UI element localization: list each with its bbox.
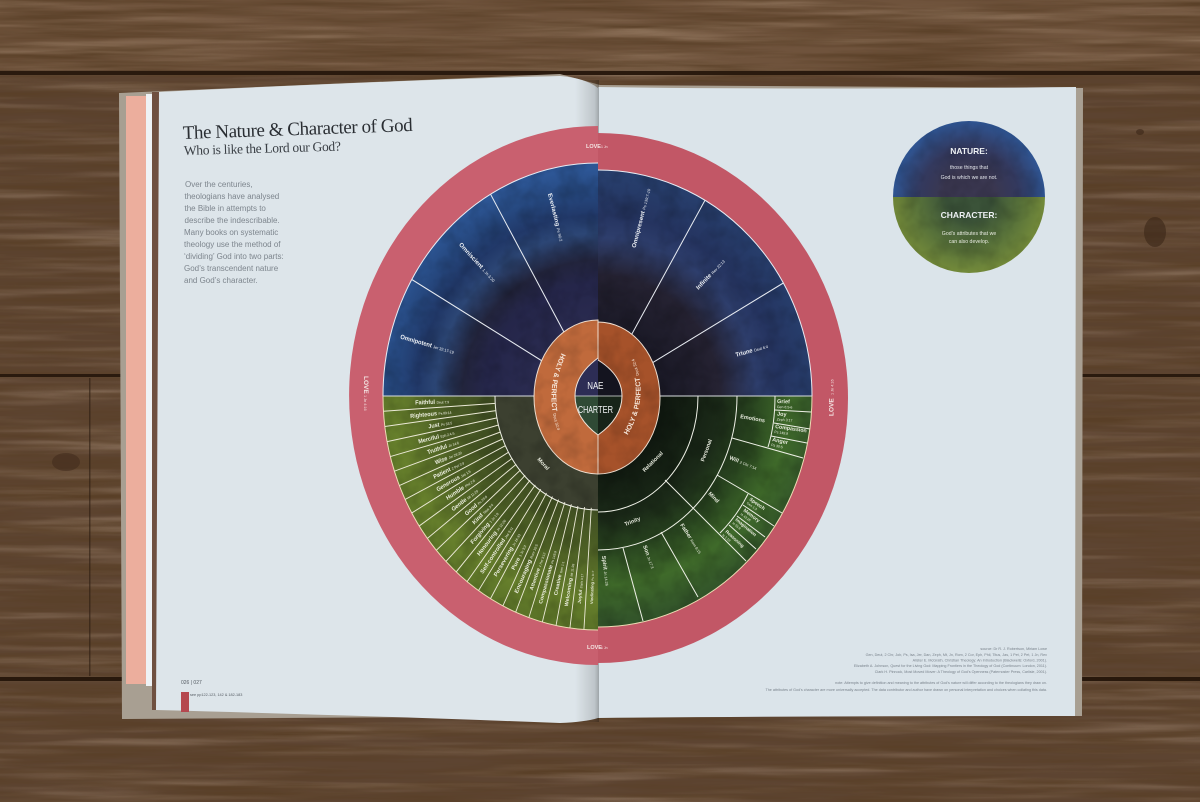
character labels right: Trinity <box>624 516 642 528</box>
intro text: Over the centuries, <box>185 180 253 189</box>
character labels right: Imagination <box>734 517 757 537</box>
outer ring: love: 1 Jn 4:16 <box>363 395 367 411</box>
legend circle: God is which we are not. <box>941 175 997 181</box>
page marker <box>181 692 189 712</box>
intro text: the Bible in attempts to <box>184 204 266 213</box>
moral attribute labels: Honouring Jn 12:26 <box>477 518 508 557</box>
character labels right: Personal <box>700 438 714 463</box>
centre lens: NA <box>587 381 599 392</box>
moral attribute labels: Patient 2 Pet 3:9 <box>433 460 465 481</box>
source notes: Clark H. Pinnock, Most Moved Mover: A Theology of God’s Openness (Paternoster Press, Carlisle, 2001). <box>875 670 1047 674</box>
character labels right: Speech <box>748 497 766 512</box>
legend circle: NATURE: <box>950 146 988 156</box>
moral attribute labels <box>410 399 595 607</box>
intro text <box>184 180 284 285</box>
character labels right: Memory <box>742 508 761 524</box>
intro text: and God’s character. <box>184 276 258 285</box>
nature labels: Omnipotent Jer 32:17-19 <box>399 334 455 356</box>
disc mottled texture <box>383 163 812 630</box>
moral attribute labels: Generous Jas 1:5 <box>436 468 472 493</box>
source notes: Elizabeth A. Johnson, Quest for the Living God: Mapping Frontiers in the Theology of God (Continuum: London, 2011). <box>854 664 1047 668</box>
character labels right: Father Rom 8:15 <box>678 523 702 555</box>
character labels right: Son Jn 17:3 <box>641 545 655 570</box>
character labels right: Mind <box>707 491 720 504</box>
character labels right: Emotions <box>740 414 765 424</box>
nature labels: Triune Deut 6:4 <box>735 344 770 359</box>
nature labels: Everlasting Ps 90:2 <box>546 193 564 242</box>
source notes: Gen, Deut, 2 Chr, Job, Ps, Isa, Jer, Dan, Zeph, Mt, Jn, Rom, 2 Cor, Eph, Phil, Titus, Jas, 1 Pet, 2 Pet, 1 Jn, Rev <box>866 653 1047 657</box>
intro text: Many books on systematic <box>184 228 278 237</box>
centre ring: holy and perfect: HOLY & PERFECT Deut 32:4 <box>624 359 641 435</box>
moral attribute labels: Encouraging Rom 15:5 <box>514 543 540 595</box>
wheel structure lines <box>383 163 812 630</box>
source notes: source: Dr R. J. Robertson, Miriam Lowe <box>980 647 1047 651</box>
nature labels: Infinite Rev 22:13 <box>696 259 727 291</box>
legend circle <box>893 121 1045 273</box>
outer ring: love: LOVE <box>828 398 836 416</box>
character labels right: Ps 145:9 <box>774 430 788 436</box>
moral attribute labels: Joyful Zeph 3:17 <box>577 573 584 604</box>
moral attribute labels: Gentle Mt 11:29 <box>451 488 480 513</box>
source notes <box>765 647 1047 692</box>
character labels right: Joy <box>777 412 787 418</box>
source notes: The attributes of God’s character are more universally accepted. The data contributor and author have drawn on personal interpretation and choices when collating this data. <box>765 688 1047 692</box>
cross reference: see pp122-123, 142 & 182-183 <box>190 693 242 697</box>
title: The Nature & Character of God <box>182 115 414 144</box>
character quadrants <box>383 396 812 630</box>
centre lens: CHAR <box>578 405 598 416</box>
diagram: nature and character wheel <box>349 126 848 665</box>
character labels right: Grief <box>777 399 790 405</box>
intro text: theologians have analysed <box>184 192 279 201</box>
outer ring: love: 1 Jn 4:16 <box>830 379 834 395</box>
outer ring: love: 1 Jn <box>601 646 608 650</box>
character labels right: Ps 30:5 <box>771 443 783 449</box>
intro text: theology use the method of <box>184 240 281 249</box>
moral attribute labels: Merciful Eph 2:4-5 <box>418 430 455 446</box>
moral attribute labels: Forgiving 1 Jn 1:9 <box>470 511 500 546</box>
moral attribute labels: Attentive 1 Pet 3:12 <box>529 551 547 591</box>
legend circle: those things that <box>950 165 989 171</box>
intro text: describe the indescribable. <box>184 216 280 225</box>
moral attribute labels: Just Ps 33:5 <box>428 420 453 430</box>
moral attribute labels: Welcoming Mt 11:28 <box>564 563 576 607</box>
moral band <box>495 396 598 510</box>
centre ring: holy and perfect: HOLY & PERFECT Deut 32:4 <box>551 353 566 430</box>
centre ring: holy and perfect <box>534 320 660 474</box>
character labels right <box>536 399 807 586</box>
character labels right: Zeph 3:17 <box>777 417 793 423</box>
moral attribute labels: Humble Phil 2:8 <box>446 478 476 502</box>
character labels right: Will 2 Chr 7:14 <box>728 455 757 472</box>
book cover <box>119 74 1083 719</box>
moral attribute labels: Truthful Jn 14:6 <box>427 440 460 456</box>
character labels right: Relational <box>642 451 665 474</box>
moral attribute labels: Faithful Deut 7:9 <box>415 399 449 407</box>
character labels right: Is 43:25 <box>740 512 752 523</box>
legend circle: can also develop. <box>949 239 989 245</box>
outer ring: love: LOVE <box>362 376 369 394</box>
character labels right: Is 55:9 <box>731 521 742 531</box>
legend circle: CHARACTER: <box>941 210 997 220</box>
moral attribute labels: Vindicating Ps 11:7 <box>589 570 595 604</box>
moral attribute labels: Righteous Ps 89:14 <box>410 410 452 420</box>
outer ring: love: 1 Jn <box>601 145 608 149</box>
centre lens <box>575 358 622 435</box>
left page <box>156 76 598 723</box>
page numbers: 026 | 027 <box>181 680 202 686</box>
page edge block <box>126 92 159 710</box>
centre lens: E <box>598 381 604 392</box>
nature labels: Omniscient 1 Jn 3:20 <box>457 242 496 284</box>
character labels right: Anger <box>772 437 788 446</box>
source notes: Alister E. McGrath, Christian Theology: An Introduction (Blackwells: Oxford, 2001). <box>913 658 1047 662</box>
character labels right: Is 1:18 <box>721 533 731 543</box>
moral attribute labels: Kind Titus 3:4 <box>472 502 495 526</box>
character labels right: Gen 6:5-6 <box>777 405 793 410</box>
right page <box>598 87 1076 718</box>
moral attribute labels: Persevering Jn 16:33 <box>493 533 522 578</box>
character labels right: Compassion <box>775 424 807 434</box>
outer ring: love: LOVE <box>587 645 602 651</box>
moral attribute labels: Wise Jer 28:29 <box>434 450 463 466</box>
outer ring: love <box>349 126 848 665</box>
character labels right: Moral <box>536 457 550 472</box>
moral attribute labels: Compassionate Ps 145:9 <box>538 550 558 605</box>
nature labels: Omnipresent Ps 139:7-10 <box>632 187 653 249</box>
character labels right: Spirit Jn 14:26 <box>600 556 610 586</box>
intro text: God’s transcendent nature <box>184 264 279 273</box>
moral attribute labels: Self-controlled Jas 5:11 <box>480 525 515 575</box>
moral attribute labels: Good Ps 25:8 <box>464 494 489 518</box>
character labels right: Gen 1:3 <box>746 501 758 511</box>
nature quadrants <box>383 163 812 396</box>
character labels right: Reasoning <box>724 529 745 548</box>
nature labels <box>399 187 770 359</box>
moral attribute labels: Pure 1 Jn 3:3 <box>511 544 528 571</box>
moral attribute labels: Creative Gen 1:1 <box>553 561 566 596</box>
subtitle: Who is like the Lord our God? <box>184 139 341 158</box>
outer ring: love: LOVE <box>586 144 601 150</box>
legend circle: God’s attributes that we <box>942 231 996 237</box>
intro text: ‘dividing’ God into two parts: <box>184 252 284 261</box>
source notes: note: Attempts to give definition and meaning to the attributes of God’s nature will differ according to the theologians they draw on. <box>835 681 1047 685</box>
centre lens: TER <box>598 405 613 416</box>
